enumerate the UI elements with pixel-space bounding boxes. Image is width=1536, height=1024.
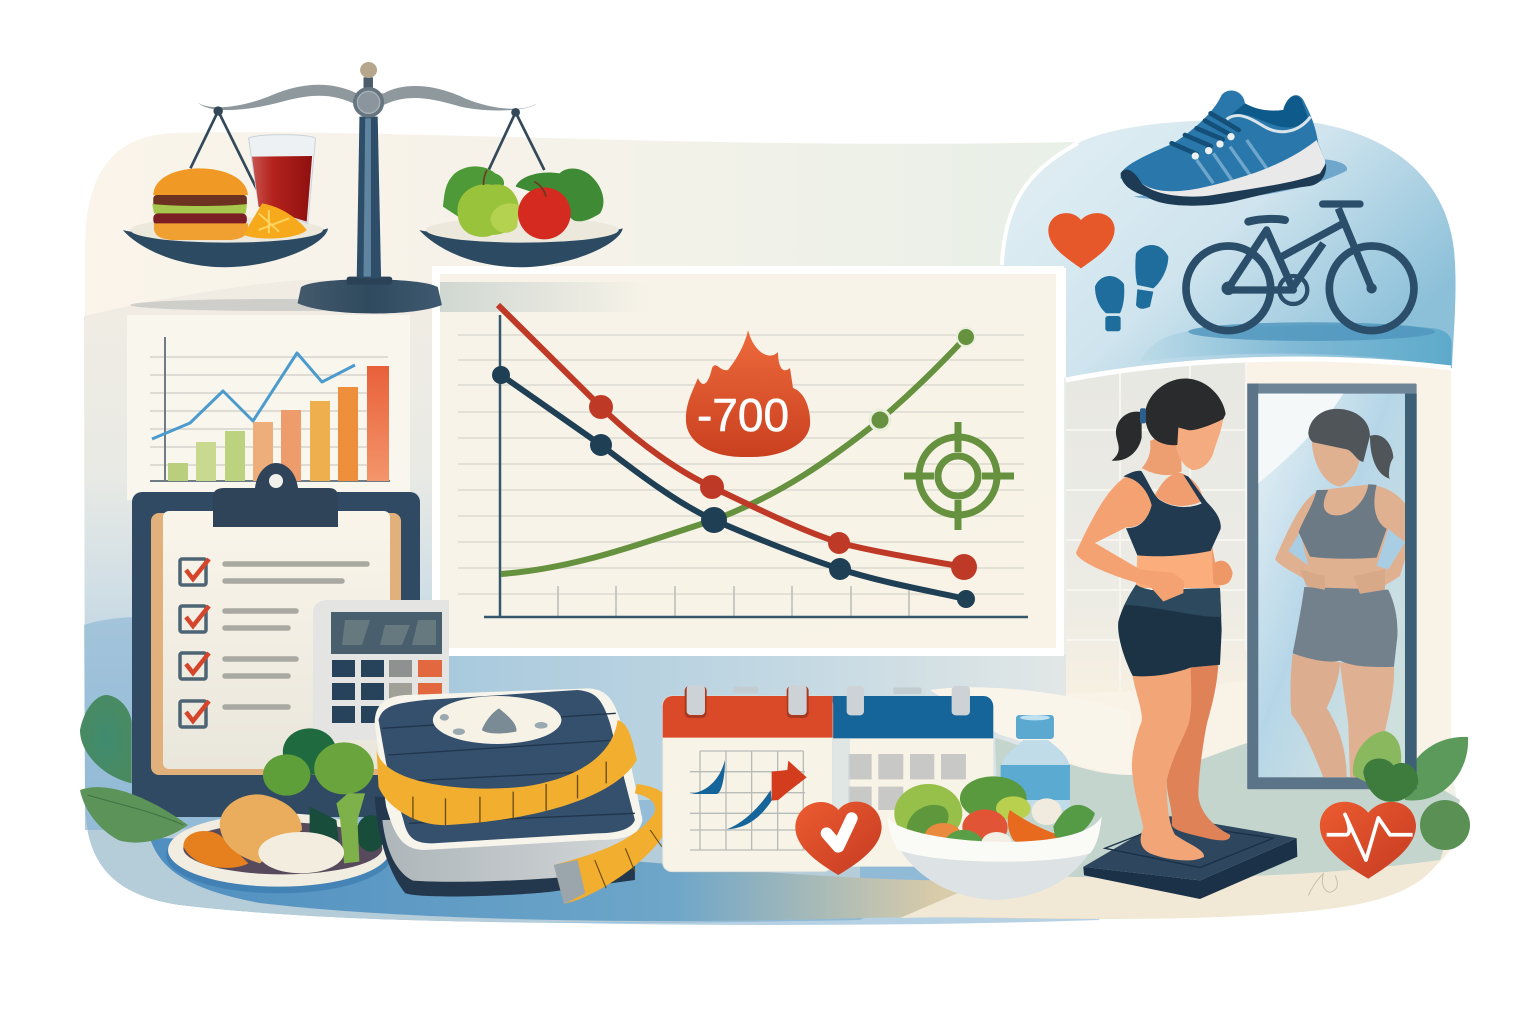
icon: running shoe: [1121, 90, 1347, 206]
woman, mirror and standing scale: [1076, 378, 1418, 899]
panel: exercise: [1002, 90, 1456, 380]
hand on waist: [1150, 573, 1184, 602]
standing scale: [1083, 816, 1297, 899]
background blob: [84, 132, 1462, 925]
icon: target: [904, 422, 1014, 530]
icon: bicycle: [1186, 204, 1414, 331]
icon: plate of healthy food: [166, 728, 392, 893]
shorts: [1118, 585, 1222, 676]
icon: calculator: [313, 600, 449, 740]
panel: mirror: [1247, 384, 1417, 789]
line: dark falling curve: [492, 366, 975, 608]
torso and arms: [1076, 473, 1233, 602]
ground strip: [1048, 90, 1452, 368]
calendar: red front: [663, 685, 833, 872]
line: green rising curve: [501, 328, 975, 574]
panel: small bar and line chart: [127, 315, 410, 500]
line: red falling curve: [498, 305, 977, 580]
bottom left group: leaves, plate, scale and tape: [80, 688, 673, 904]
icon: boxing gloves: [1095, 245, 1168, 331]
head and hair: [1112, 378, 1226, 475]
legs: [1132, 665, 1230, 860]
panel: bathroom room: [900, 359, 1460, 919]
icon: flame with -700: [686, 330, 810, 457]
icon: light plant leaf: [1353, 731, 1401, 786]
icon: heart with pulse: [1320, 802, 1416, 879]
icon: dark plant leaf: [1363, 759, 1418, 802]
checklist items: [180, 559, 367, 727]
icon: bathroom scale with tape measure: [375, 688, 673, 904]
icon: heart with check: [795, 802, 882, 875]
sports top: [1123, 471, 1221, 556]
icon: balance scale: [123, 62, 623, 314]
left pan with burger, drink and orange: [123, 135, 328, 267]
right pan with fruit and vegetables: [419, 166, 623, 267]
icon: flame with -700: -700: [697, 389, 789, 441]
icon: heart: [1048, 213, 1115, 268]
icon: salad bowl: [887, 776, 1102, 900]
icon: right plant: [1404, 737, 1470, 850]
floor scribble: [1308, 874, 1337, 896]
calendar: blue back: [823, 686, 993, 867]
icon: calendars, bottle, heart and bowl: [663, 685, 1102, 900]
icon: water bottle: [1001, 715, 1070, 810]
icon: left leaves: [80, 695, 188, 843]
mirror reflection of woman: [1275, 409, 1405, 777]
panel: main line chart: [436, 270, 1060, 652]
tape measure: [377, 720, 673, 904]
icon: clipboard checklist: [132, 463, 420, 817]
